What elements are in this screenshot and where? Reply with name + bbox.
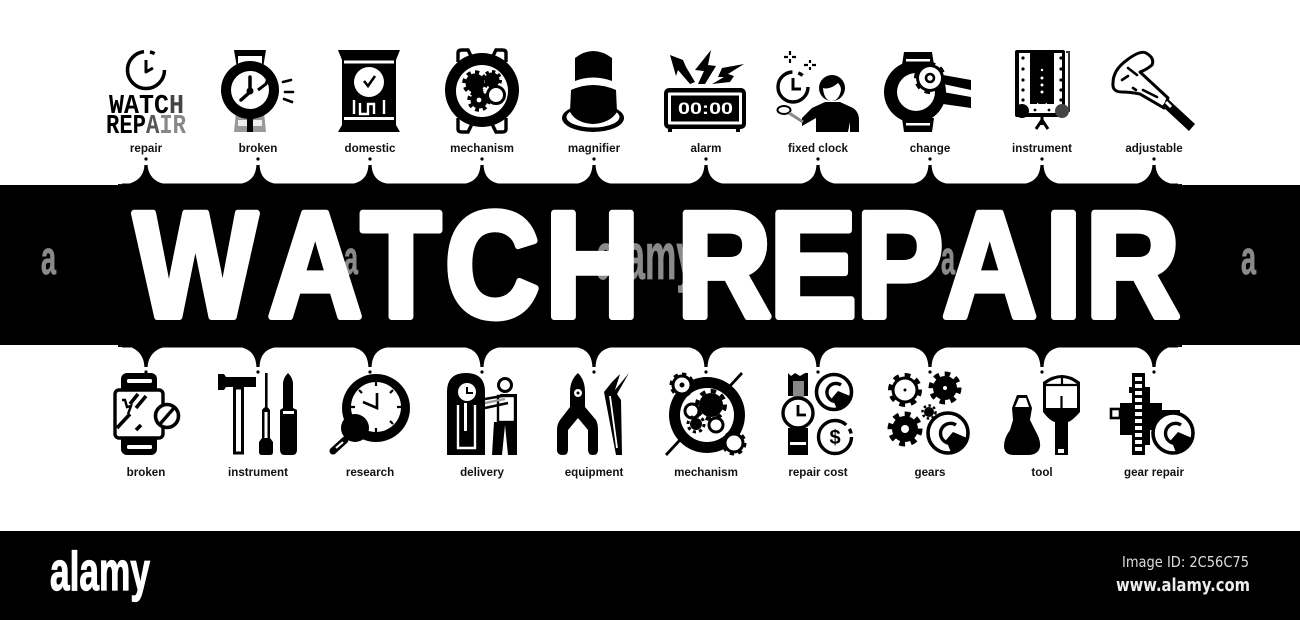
icon: mantel clock [338,50,400,132]
icon: magnifier over clock [333,374,410,451]
icon: man fixing clock [778,51,859,132]
title: WATCH REPAIR [134,181,1180,349]
label: adjustable: adjustable [1125,142,1183,155]
icon: man delivering grandfather clock [447,373,517,455]
item: domestic [338,50,400,155]
label: tool: tool [1031,466,1053,479]
watermark letters behind title: a [344,231,358,284]
label: broken: broken [239,142,277,155]
icon: pliers and tweezers [557,373,629,455]
item: adjustable [1113,52,1195,155]
label: fixed clock: fixed clock [788,142,849,155]
label: repair: repair [130,142,163,155]
item: repair cost [783,373,852,479]
label: gear repair: gear repair [1124,466,1184,479]
icon: broken smartwatch [115,373,178,455]
item: repair [106,52,187,155]
icon: gears and wrench [890,374,968,453]
icon: clock with watch repair wordmark: REPAIR [106,112,187,142]
watermark letters behind title: a [41,231,56,284]
label: magnifier: magnifier [568,142,621,155]
label: delivery: delivery [460,466,504,479]
footer logo: alamy [50,540,150,602]
item: broken [221,50,293,155]
label: equipment: equipment [565,466,623,479]
label: gears: gears [915,466,945,479]
watermark letters behind title: a [1241,231,1256,284]
watermark letters behind title: alamy [596,219,696,293]
icon: instrument case [1015,50,1069,129]
item: alarm [664,50,746,155]
icon: watch, wrench and dollar: $ [829,427,841,449]
item: mechanism [445,50,519,155]
label: repair cost: repair cost [788,466,848,479]
label: broken: broken [127,466,165,479]
icon: watchmaker loupe [562,51,624,132]
footer bar [0,531,1300,620]
icon: mechanism with floating gears [666,373,745,455]
label: research: research [346,466,394,479]
label: instrument: instrument [228,466,288,479]
item: change [884,52,971,155]
icon: hammer, screwdriver and knife [218,373,297,455]
icon: digital alarm clock: 00:00 [678,99,733,118]
bottom row items [115,373,1193,479]
footer image id: Image ID: 2C56C75 [1122,553,1249,571]
item: tool [1004,375,1080,479]
footer url: www.alamy.com [1116,576,1250,596]
item: fixed clock [778,51,859,155]
central black band [0,157,1300,374]
item: equipment [557,373,629,479]
icon: watch with gear and strap change [884,52,971,132]
item: magnifier [562,51,624,155]
label: alarm: alarm [691,142,721,155]
icon: bell tool and screw head [1004,375,1080,455]
item: instrument [218,373,297,479]
label: mechanism: mechanism [450,142,514,155]
label: change: change [910,142,951,155]
item: research [333,374,410,479]
label: domestic: domestic [345,142,396,155]
icon: broken wrist watch [221,50,293,132]
icon: watch case opener [1113,52,1195,131]
item: delivery [447,373,517,479]
icon: clock with watch repair wordmark: WATCH [109,92,184,122]
item: instrument [1012,50,1072,155]
label: mechanism: mechanism [674,466,738,479]
item: gears [890,374,968,479]
label: instrument: instrument [1012,142,1072,155]
item: mechanism [666,373,745,479]
watermark letters behind title [41,219,1256,293]
icon: watch mechanism with gears [445,50,519,132]
icon: gear rack and wrench [1111,373,1193,455]
watermark letters behind title: a [941,231,955,284]
item: gear repair [1111,373,1193,479]
item: broken [115,373,178,479]
top row items [106,50,1195,155]
icon: clock with watch repair wordmark [106,52,187,142]
